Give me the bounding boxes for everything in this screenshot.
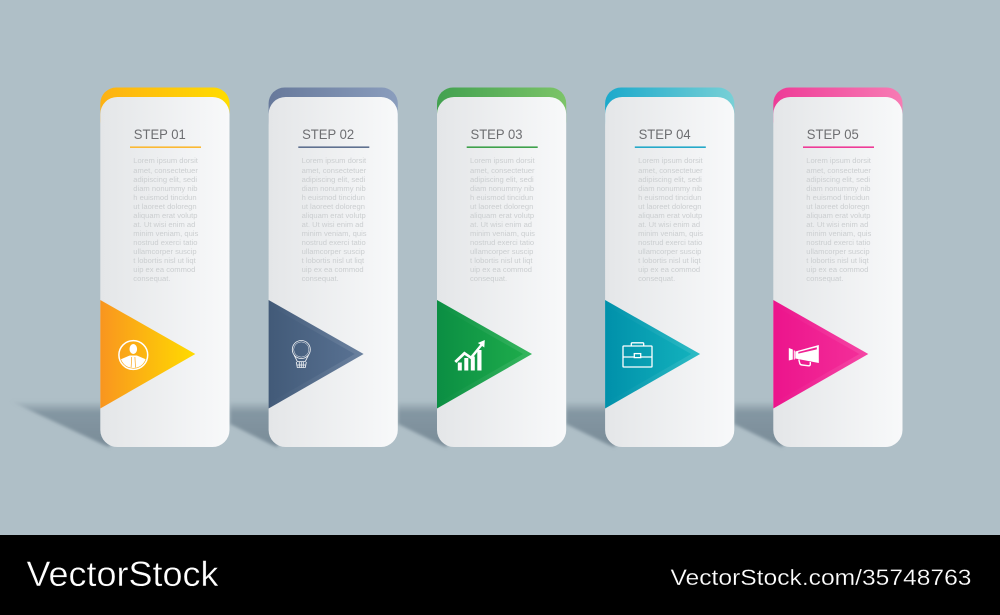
body text 01: ullamcorper suscip: [133, 247, 197, 256]
heading 01: STEP 01: [134, 126, 186, 142]
panel: step 05: [773, 88, 902, 447]
footer bar: [0, 535, 1000, 615]
body text 04: nostrud exerci tatio: [638, 238, 702, 247]
panel: step 04: [605, 88, 734, 447]
body text 05: ullamcorper suscip: [806, 247, 870, 256]
body text 04: t lobortis nisl ut liqt: [638, 256, 701, 265]
arrow triangle 04: [605, 300, 700, 408]
body text 01: [133, 156, 199, 283]
body text 04: uip ex ea commod: [638, 265, 700, 274]
body text 01: h euismod tincidun: [133, 193, 197, 202]
body text 03: diam nonummy nib: [470, 184, 534, 193]
body text 05: [806, 156, 872, 283]
body text 05: ut laoreet doloregn: [806, 202, 870, 211]
body text 05: at. Ut wisi enim ad: [806, 220, 868, 229]
body text 02: at. Ut wisi enim ad: [302, 220, 364, 229]
body text 04: ut laoreet doloregn: [638, 202, 701, 211]
body text 04: ullamcorper suscip: [638, 247, 701, 256]
body text 04: consequat.: [638, 274, 675, 283]
body text 04: [638, 156, 704, 283]
body text 02: Lorem ipsum dorsit: [302, 156, 367, 165]
card body 01: [100, 97, 230, 447]
top tab 04: [605, 88, 734, 138]
heading 05: STEP 05: [807, 126, 859, 142]
icon: light bulb balloon: [292, 340, 310, 368]
body text 01: uip ex ea commod: [133, 265, 195, 274]
heading 04: STEP 04: [639, 126, 691, 142]
card body 05: [773, 97, 902, 447]
body text 03: aliquam erat volutp: [470, 211, 534, 220]
card body 03: [437, 97, 566, 447]
body text 01: minim veniam, quis: [133, 229, 198, 238]
panel: step 02: [269, 88, 398, 447]
heading 03: STEP 03: [471, 126, 523, 142]
body text 05: h euismod tincidun: [806, 193, 870, 202]
body text 05: minim veniam, quis: [806, 229, 871, 238]
body text 03: uip ex ea commod: [470, 265, 532, 274]
body text 04: Lorem ipsum dorsit: [638, 156, 704, 165]
body text 01: ut laoreet doloregn: [133, 202, 197, 211]
body text 03: h euismod tincidun: [470, 193, 533, 202]
body text 03: at. Ut wisi enim ad: [470, 220, 532, 229]
body text 05: nostrud exerci tatio: [806, 238, 870, 247]
body text 03: amet, consectetuer: [470, 166, 535, 175]
body text 05: aliquam erat volutp: [806, 211, 870, 220]
body text 04: diam nonummy nib: [638, 184, 702, 193]
body text 03: minim veniam, quis: [470, 229, 535, 238]
body text 05: consequat.: [806, 274, 843, 283]
body text 05: diam nonummy nib: [806, 184, 870, 193]
card body 04: [605, 97, 734, 447]
body text 04: amet, consectetuer: [638, 166, 703, 175]
body text 01: at. Ut wisi enim ad: [133, 220, 195, 229]
body text 02: adipiscing elit, sedi: [302, 175, 366, 184]
body text 05: t lobortis nisl ut liqt: [806, 256, 870, 265]
body text 01: aliquam erat volutp: [133, 211, 197, 220]
underline 05: [803, 146, 874, 148]
top tab 02: [269, 88, 398, 138]
body text 02: consequat.: [302, 274, 339, 283]
icon: businessman: [119, 341, 148, 372]
body text 05: Lorem ipsum dorsit: [806, 156, 872, 165]
body text 04: adipiscing elit, sedi: [638, 175, 702, 184]
underline 03: [467, 146, 538, 148]
brand logo text: VectorStock: [26, 555, 219, 594]
body text 04: minim veniam, quis: [638, 229, 703, 238]
body text 01: amet, consectetuer: [133, 166, 198, 175]
body text 02: aliquam erat volutp: [302, 211, 366, 220]
body text 02: nostrud exerci tatio: [302, 238, 366, 247]
arrow triangle 01: [100, 300, 195, 408]
card body 02: [269, 97, 398, 447]
underline 02: [298, 146, 369, 148]
body text 01: consequat.: [133, 274, 170, 283]
body text 02: [302, 156, 367, 283]
body text 03: ullamcorper suscip: [470, 247, 533, 256]
arrow triangle 02: [269, 300, 364, 408]
top tab 03: [437, 88, 566, 138]
body text 03: consequat.: [470, 274, 507, 283]
icon: growth chart: [454, 340, 485, 370]
body text 03: adipiscing elit, sedi: [470, 175, 534, 184]
body text 03: [470, 156, 535, 283]
body text 05: adipiscing elit, sedi: [806, 175, 870, 184]
heading 02: STEP 02: [302, 126, 354, 142]
body text 01: diam nonummy nib: [133, 184, 197, 193]
body text 02: h euismod tincidun: [302, 193, 365, 202]
body text 03: nostrud exerci tatio: [470, 238, 534, 247]
body text 02: ullamcorper suscip: [302, 247, 365, 256]
body text 02: ut laoreet doloregn: [302, 202, 365, 211]
image id text: VectorStock.com/35748763: [670, 565, 972, 590]
body text 02: minim veniam, quis: [302, 229, 367, 238]
body text 03: ut laoreet doloregn: [470, 202, 533, 211]
icon: megaphone: [789, 345, 819, 366]
body text 05: amet, consectetuer: [806, 166, 871, 175]
body text 03: t lobortis nisl ut liqt: [470, 256, 533, 265]
body text 02: uip ex ea commod: [302, 265, 364, 274]
underline 04: [635, 146, 706, 148]
body text 02: t lobortis nisl ut liqt: [302, 256, 365, 265]
body text 05: uip ex ea commod: [806, 265, 868, 274]
body text 01: Lorem ipsum dorsit: [133, 156, 199, 165]
body text 03: Lorem ipsum dorsit: [470, 156, 535, 165]
body text 02: diam nonummy nib: [302, 184, 366, 193]
card shadows: [10, 401, 783, 447]
arrow triangle 05: [773, 300, 868, 408]
panel: step 03: [437, 88, 566, 447]
top tab 01: [100, 88, 230, 138]
icon: briefcase: [623, 343, 652, 367]
body text 04: aliquam erat volutp: [638, 211, 702, 220]
body text 02: amet, consectetuer: [302, 166, 367, 175]
body text 04: at. Ut wisi enim ad: [638, 220, 700, 229]
body text 01: adipiscing elit, sedi: [133, 175, 197, 184]
body text 01: t lobortis nisl ut liqt: [133, 256, 197, 265]
panel: step 01: [100, 88, 230, 447]
body text 01: nostrud exerci tatio: [133, 238, 197, 247]
arrow triangle 03: [437, 300, 532, 408]
top tab 05: [773, 88, 902, 138]
body text 04: h euismod tincidun: [638, 193, 701, 202]
underline 01: [130, 146, 201, 148]
